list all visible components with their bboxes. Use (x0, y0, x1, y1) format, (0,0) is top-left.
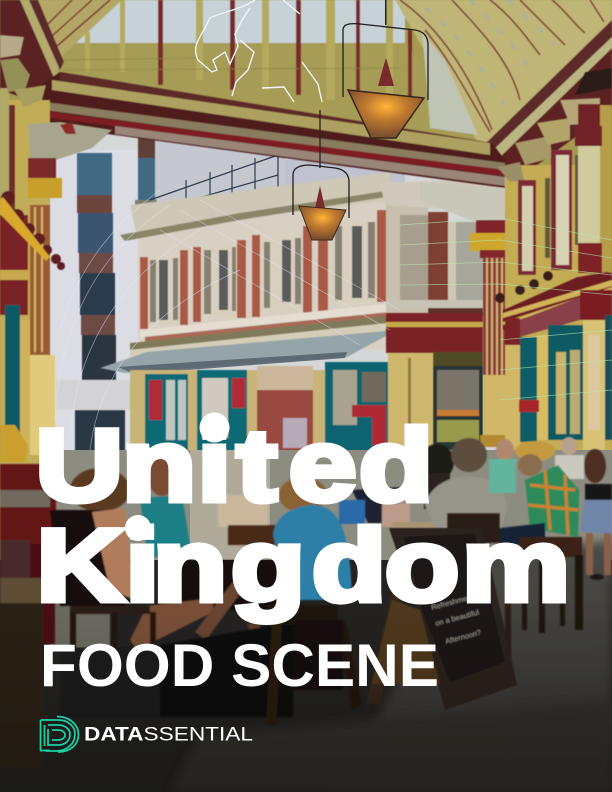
right diagonal beam (486, 20, 612, 153)
wavy contour lines across the photo (55, 190, 400, 450)
awning (100, 330, 397, 373)
lantern: small (293, 110, 349, 240)
chair and dark seating (70, 606, 150, 614)
right pillar (420, 182, 516, 447)
stool right (519, 537, 582, 557)
chalkboard sign: Afternoon? (444, 628, 482, 646)
tall windows (518, 180, 536, 275)
carved columns on the left (0, 35, 112, 470)
cream top woman (218, 495, 268, 527)
navy and blue seated people (352, 487, 400, 523)
main cross beam (27, 72, 505, 188)
street floor and cobbles (0, 450, 612, 792)
lantern: large (343, 0, 428, 138)
pillar and far bay (386, 200, 428, 315)
subtitle: FOOD SCENE: FOOD SCENE (40, 632, 439, 699)
central brick building (120, 172, 508, 358)
sash windows (148, 220, 377, 325)
grey striped tee man (451, 438, 487, 472)
chalkboard sign: Refreshment (430, 592, 475, 612)
icon: Datassential D mark (40, 716, 78, 752)
white shirt back (561, 437, 577, 455)
roof: right arched panels (395, 0, 612, 143)
woman in dark (70, 468, 130, 512)
teal shirt man (140, 495, 190, 560)
title: United Kingdom: United (35, 409, 433, 522)
brick piers (140, 210, 386, 329)
chalkboard sign (366, 528, 517, 710)
dark-window office block (56, 135, 157, 453)
chalkboard sign: on a beautiful (434, 607, 480, 628)
seated figures' legs (160, 560, 300, 610)
teal top standing (496, 439, 514, 461)
railing on far roof (150, 152, 278, 212)
stool and table (228, 525, 278, 545)
left red base and barrel (0, 464, 56, 544)
patrons and terrace seating (0, 437, 612, 767)
left diagonal beam (20, 0, 60, 80)
blue shirt woman (279, 477, 327, 513)
facade bands (503, 272, 612, 330)
walking woman (584, 449, 606, 483)
title: United Kingdom (35, 409, 570, 622)
shopfronts (130, 313, 483, 460)
roof glazing and ceiling (0, 0, 612, 185)
sky and far buildings in the opening (30, 115, 505, 450)
logo: Datassential (40, 716, 253, 752)
shop bays (505, 345, 520, 455)
title: United Kingdom: Kingdom (37, 509, 570, 622)
dark haired pair (420, 444, 454, 480)
roof: left panels (38, 0, 122, 58)
wordmark: DATA SSENTIAL (84, 724, 253, 746)
left maroon corner (0, 0, 58, 100)
right-hand arcade facade (495, 98, 612, 455)
corbels (497, 162, 524, 182)
darkening gradient over the lower photo (0, 600, 612, 792)
checked shirt man (515, 441, 555, 461)
maroon fascia (386, 313, 483, 353)
outline map of the UK (196, 0, 322, 102)
